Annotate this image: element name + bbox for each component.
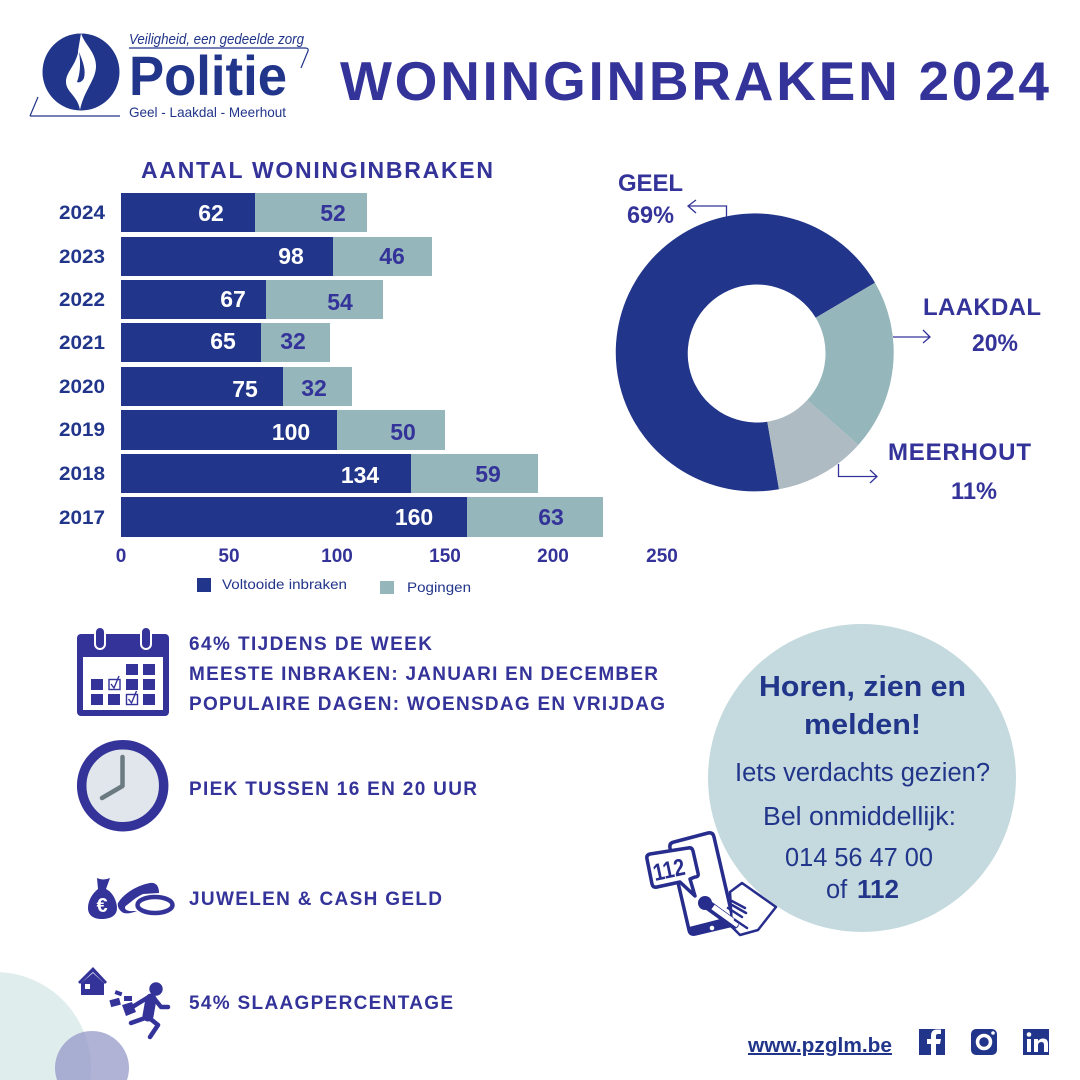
chart heading: AANTAL WONINGINBRAKEN [141,157,493,183]
x axis: 50 [218,546,240,567]
callout: horen, zien en melden: of [826,876,848,904]
label: meerhout [838,439,1031,505]
completed burglary values: 75 [232,376,258,402]
icon: clock [82,745,164,827]
icon: phone calling 112: 112 [651,854,688,887]
year labels: 2023 [59,247,105,268]
label: geel: GEEL [618,170,683,197]
key facts text [189,634,665,1014]
icon: money bag and jewellery [88,878,172,919]
legend: Voltooide inbraken [222,576,347,592]
footer website link: www.pzglm.be [747,1035,892,1057]
completed burglary values: 160 [395,504,433,530]
year labels: 2024 [59,203,105,224]
x axis: 100 [321,546,353,567]
attempt values: 59 [475,461,501,487]
callout: horen, zien en melden: Bel onmiddellijk: [763,803,956,831]
donut chart [616,170,1041,505]
label: geel: 69% [627,202,674,229]
key facts text: POPULAIRE DAGEN: WOENSDAG EN VRIJDAG [189,694,665,715]
police logo: Geel - Laakdal - Meerhout [129,104,286,120]
year labels: 2022 [59,290,105,311]
completed burglary values: 98 [278,243,304,269]
year labels [59,203,105,529]
callout: horen, zien en melden: 014 56 47 00 [785,844,933,872]
attempt values: 63 [538,504,564,530]
x axis: 200 [537,546,569,567]
label: geel [618,170,726,229]
label: laakdal [893,294,1041,357]
bar chart: aantal woninginbraken [59,157,678,595]
title: WONINGINBRAKEN 2024 [340,50,1049,112]
year labels: 2017 [59,508,105,529]
attempt values: 32 [280,328,306,354]
attempt values: 46 [379,243,405,269]
x axis: 150 [429,546,461,567]
callout: horen, zien en melden: Iets verdachts gezien? [735,759,990,787]
police logo: Veiligheid, een gedeelde zorg [129,32,304,48]
attempt values: 52 [320,200,346,226]
label: laakdal: LAAKDAL [923,294,1041,321]
icon: facebook [919,1029,945,1055]
attempt values: 50 [390,419,416,445]
label: meerhout: 11% [951,478,997,505]
callout: horen, zien en melden: 112 [857,876,899,904]
legend [197,576,471,595]
key facts text: PIEK TUSSEN 16 EN 20 UUR [189,779,477,800]
x axis: 0 [116,546,126,567]
icon: burglar fleeing house [78,967,168,1037]
year labels: 2018 [59,464,105,485]
attempt values: 54 [327,289,353,315]
year labels: 2019 [59,420,105,441]
icon: linkedin [1023,1029,1049,1055]
year labels: 2021 [59,333,105,354]
bars [121,193,603,537]
completed burglary values: 134 [341,462,379,488]
completed burglary values [198,200,433,530]
icon: phone calling 112 [647,833,776,935]
completed burglary values: 67 [220,286,246,312]
x axis: 250 [646,546,678,567]
attempt values [280,200,564,530]
icon: calendar [77,627,169,716]
key facts text: JUWELEN & CASH GELD [189,889,442,910]
police logo [30,32,308,120]
key facts text: MEESTE INBRAKEN: JANUARI EN DECEMBER [189,664,658,685]
completed burglary values: 62 [198,200,224,226]
callout: horen, zien en melden [708,624,1016,932]
key facts text: 54% SLAAGPERCENTAGE [189,993,453,1014]
decorative circles bottom left [0,972,129,1080]
callout: horen, zien en melden: Horen, zien en [759,671,966,703]
legend: Pogingen [407,579,471,595]
year labels: 2020 [59,377,105,398]
key facts text: 64% TIJDENS DE WEEK [189,634,432,655]
callout: horen, zien en melden: melden! [804,709,921,741]
label: meerhout: MEERHOUT [888,439,1031,466]
attempt values: 32 [301,375,327,401]
x axis [116,546,678,567]
label: laakdal: 20% [972,330,1018,357]
icon: money bag and jewellery: € [96,895,108,917]
completed burglary values: 100 [272,419,310,445]
completed burglary values: 65 [210,328,236,354]
police logo: Politie [129,44,287,107]
icon: instagram [971,1029,997,1055]
